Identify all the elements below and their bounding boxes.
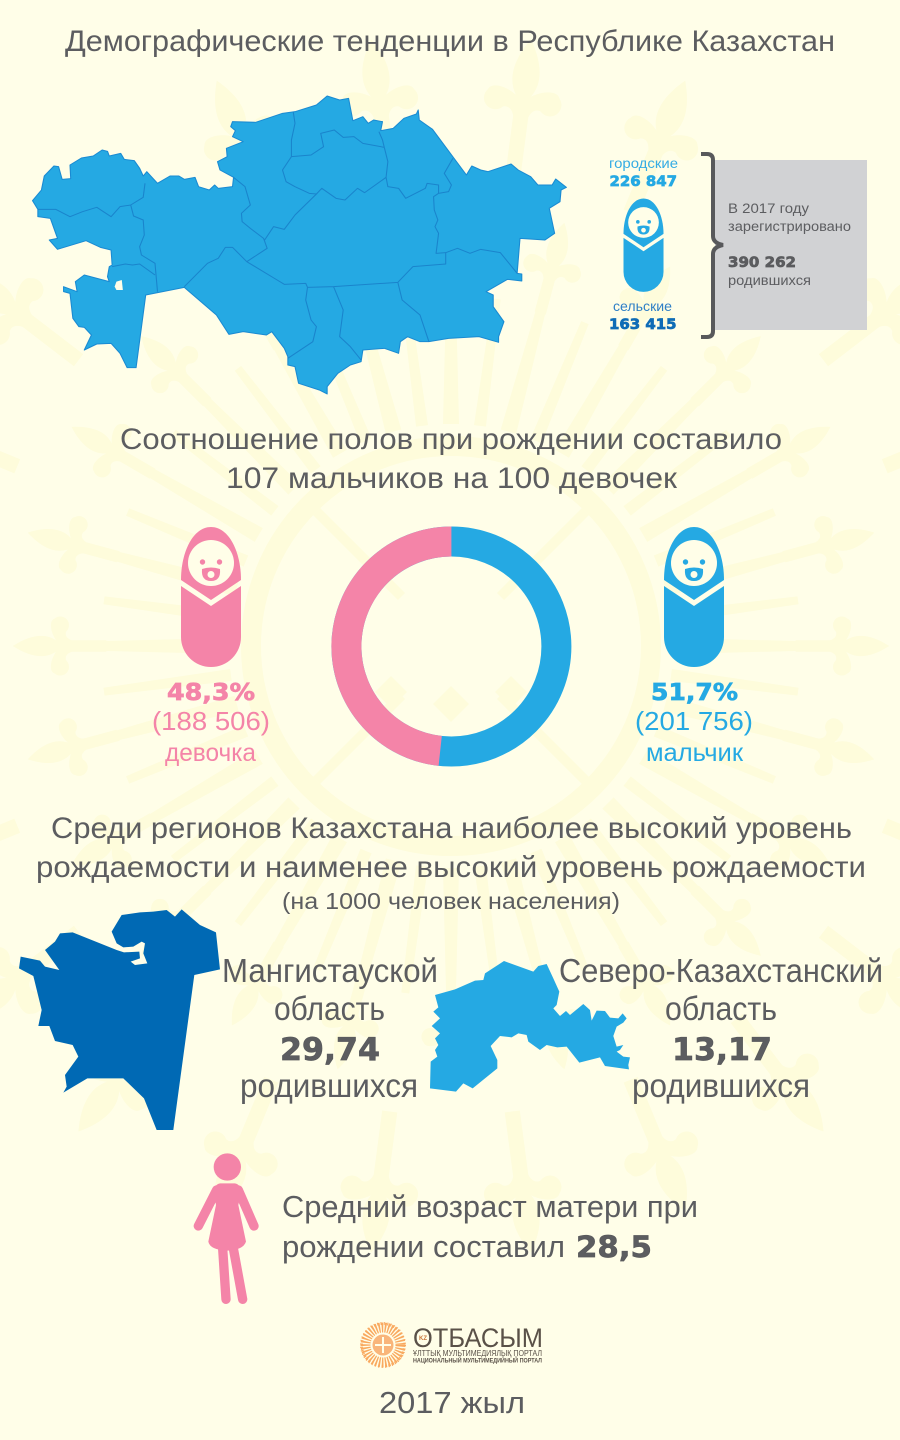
North Kazakhstan text: область [665,990,777,1027]
Mangystau text: 29,74 [280,1032,380,1068]
year footer: 2017 жыл [379,1385,525,1420]
boy statistics: 51,7% [651,680,738,706]
urban births label: городские [609,156,678,171]
heading: regional birth rate: (на 1000 человек населения) [282,888,620,914]
panel: total births: зарегистрировано [728,219,851,234]
mother age text [282,1189,698,1264]
North Kazakhstan text: Северо-Казахстанский [559,952,883,989]
mother age text: Средний возраст матери при [282,1189,698,1224]
Mangystau text: область [274,990,385,1027]
icon: mother [198,1153,254,1299]
map: North Kazakhstan region [430,961,630,1092]
heading: regional birth rate: Среди регионов Казахстана наиболее высокий уровень [51,812,852,845]
panel: total births: В 2017 году [728,201,809,216]
heading: sex ratio: 107 мальчиков на 100 девочек [226,462,678,495]
map: Mangystau region [19,909,220,1130]
brace [701,154,723,337]
Mangystau text [222,952,438,1104]
boy statistics: (201 756) [635,706,753,736]
panel: total births: родившихся [728,273,811,288]
Mangystau text: родившихся [240,1067,418,1104]
panel: total births [715,160,867,330]
girl statistics [152,680,270,767]
logo: KZ [419,1336,427,1342]
girl statistics: девочка [165,739,256,767]
Mangystau text: Мангистауской [222,952,438,989]
map: Kazakhstan regions [32,96,566,394]
boy statistics: мальчик [646,739,744,767]
logo: ҰЛТТЫҚ МУЛЬТИМЕДИЯЛЫҚ ПОРТАЛ [413,1348,542,1358]
boy statistics [635,680,753,767]
mother age text: 28,5 [576,1230,652,1264]
heading: regional birth rate [36,812,866,914]
donut chart [346,542,556,752]
panel: total births: 390 262 [728,255,796,271]
North Kazakhstan text [559,952,883,1104]
heading: regional birth rate: рождаемости и наименее высокий уровень рождаемости [36,851,866,884]
heading: sex ratio: Соотношение полов при рождении составило [120,423,782,456]
title: Демографические тенденции в Республике Казахстан [65,25,835,58]
girl statistics: (188 506) [152,706,270,736]
rural births label: 163 415 [609,317,676,333]
rural births label [609,299,676,333]
logo: НАЦИОНАЛЬНЫЙ МУЛЬТИМЕДИЙНЫЙ ПОРТАЛ [413,1356,542,1364]
rural births label: сельские [613,299,672,314]
icon: boy baby [664,527,724,667]
icon: small baby [624,198,664,292]
heading: sex ratio [120,423,782,495]
urban births label: 226 847 [610,174,677,190]
icon: girl baby [181,527,241,667]
North Kazakhstan text: родившихся [632,1067,810,1104]
North Kazakhstan text: 13,17 [672,1032,772,1068]
girl statistics: 48,3% [167,680,255,706]
logo [362,1323,543,1366]
urban births label [609,156,678,190]
mother age text: рождении составил [282,1229,565,1264]
logo: ОТБАСЫМ [413,1323,543,1353]
